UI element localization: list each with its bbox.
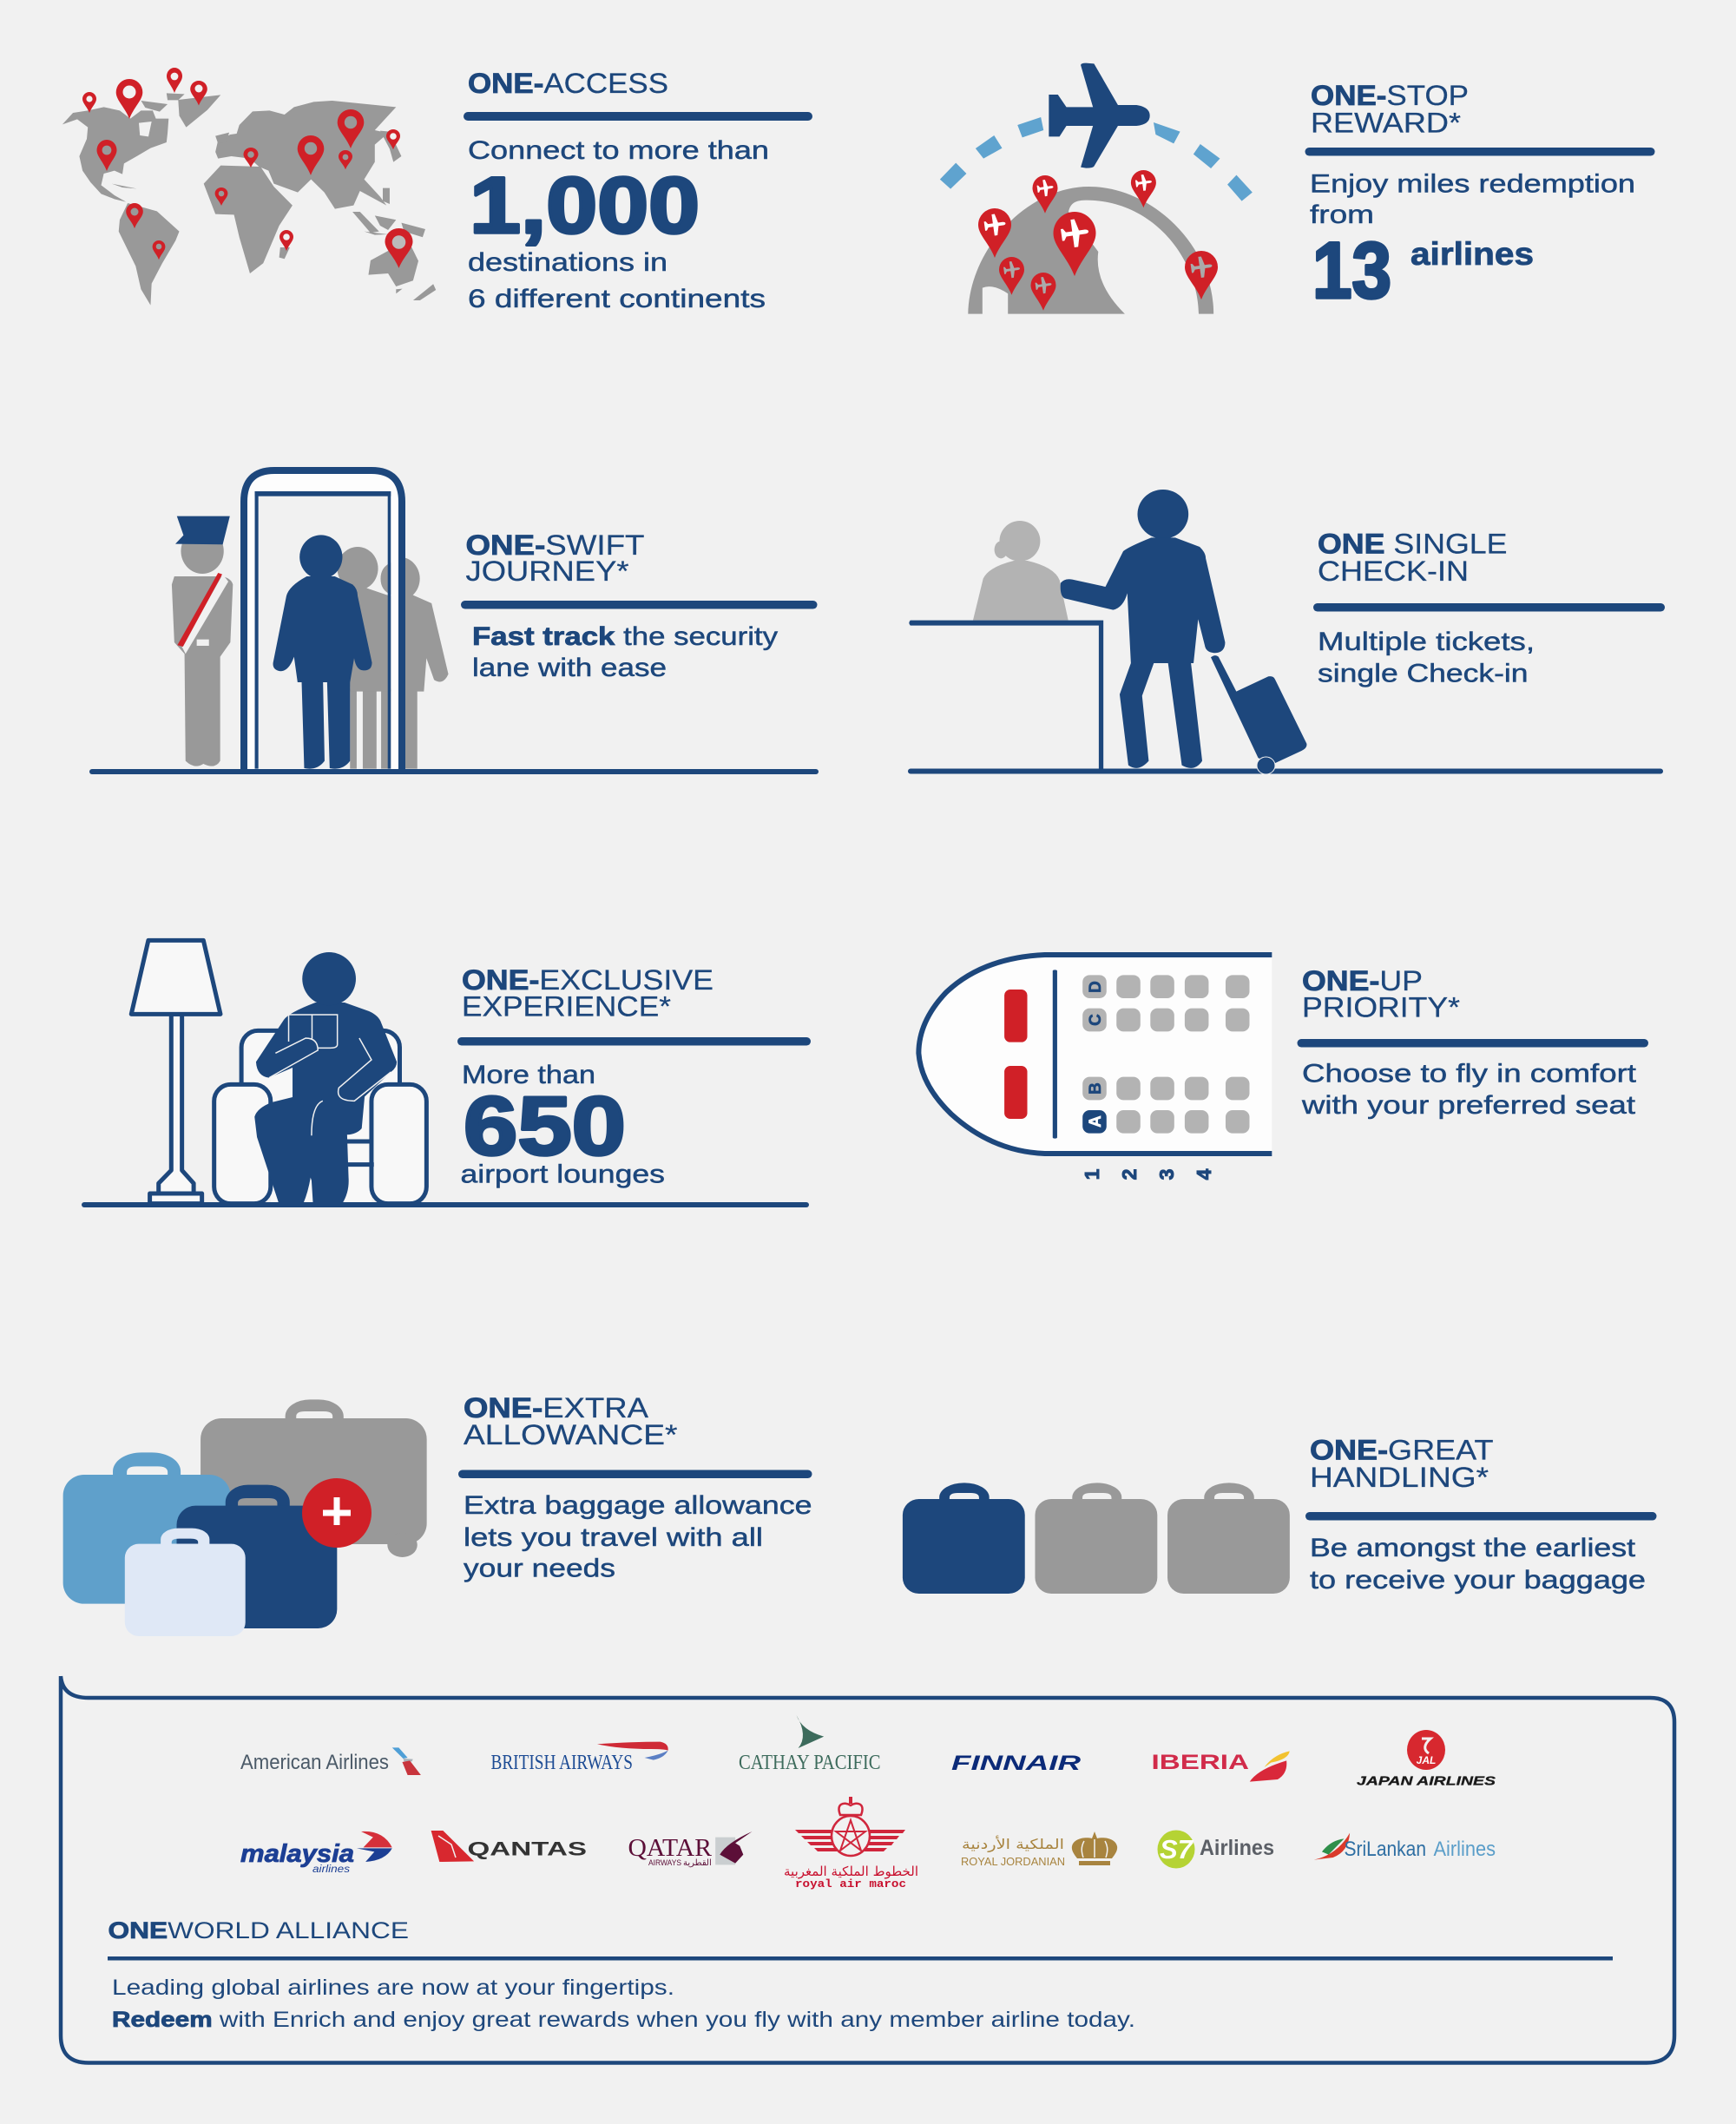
icon: traveller bbox=[273, 535, 372, 769]
icon: pale suitcase bbox=[125, 1529, 246, 1636]
heading: one-stop reward bbox=[1311, 80, 1469, 139]
text block: alliance copy bbox=[112, 1976, 1135, 2032]
text block: allowance copy: lets you travel with all bbox=[464, 1523, 763, 1552]
icon: floor lamp bbox=[131, 940, 220, 1204]
icon: grey suitcase bbox=[201, 1399, 427, 1557]
heading: one-extra allowance: ONE- EXTRA bbox=[464, 1392, 649, 1424]
logo: American Airlines: American Airlines bbox=[240, 1751, 389, 1774]
heading: one-stop reward: ONE-STOP bbox=[1311, 80, 1469, 111]
logo: Royal Air Maroc: royal air maroc bbox=[795, 1877, 906, 1891]
text block: priority copy bbox=[1301, 1059, 1637, 1120]
logo: Royal Air Maroc: الخطوط الملكية المغربية bbox=[784, 1864, 918, 1879]
icon: grey bag bbox=[1167, 1483, 1290, 1594]
heading: one single check-in bbox=[1318, 528, 1507, 587]
text block: lounge copy: More than bbox=[462, 1061, 595, 1089]
logo: Malaysia Airlines: airlines bbox=[312, 1863, 350, 1875]
panel: one-swift journey bbox=[89, 470, 819, 774]
heading: one-extra allowance bbox=[464, 1392, 677, 1450]
row numbers: 1 bbox=[1081, 1168, 1103, 1180]
text block: access copy: Connect to more than bbox=[468, 136, 769, 165]
seat letters: B bbox=[1087, 1082, 1105, 1095]
icon: three bags bbox=[903, 1483, 1290, 1594]
heading: one-swift journey: JOURNEY* bbox=[465, 556, 628, 587]
text block: allowance copy: your needs bbox=[464, 1554, 615, 1583]
icon: counter bbox=[909, 621, 1103, 773]
logo: Qantas bbox=[431, 1831, 587, 1862]
text block: reward copy: Enjoy miles redemption bbox=[1310, 170, 1635, 198]
heading: one-up priority: ONE- UP bbox=[1302, 965, 1423, 996]
icon: suitcase bbox=[1211, 655, 1306, 764]
panel: one-stop reward bbox=[940, 63, 1654, 315]
row numbers: 3 bbox=[1155, 1169, 1178, 1180]
logo: Iberia bbox=[1151, 1751, 1290, 1782]
icon: security scene bbox=[172, 470, 449, 769]
heading: one-exclusive experience: EXPERIENCE* bbox=[462, 991, 671, 1023]
text block: access copy: 6 different continents bbox=[468, 285, 766, 313]
heading: one-access: ONE-ACCESS bbox=[468, 68, 668, 99]
heading: one-great handling: ONE- GREAT bbox=[1310, 1434, 1493, 1465]
icon: plane pins bbox=[978, 170, 1218, 311]
text block: priority copy: with your preferred seat bbox=[1301, 1091, 1636, 1120]
row numbers bbox=[1081, 1168, 1215, 1180]
text block: access copy: 1,000 bbox=[470, 161, 700, 250]
icon: blue suitcase bbox=[63, 1452, 230, 1604]
logo: S7 Airlines: S7 bbox=[1160, 1834, 1194, 1864]
heading: one single check-in: CHECK-IN bbox=[1318, 556, 1469, 587]
icon: seated traveller bbox=[254, 952, 397, 1204]
text block: check-in copy bbox=[1318, 628, 1535, 687]
heading: one-swift journey bbox=[465, 529, 644, 587]
icon: passenger bbox=[1061, 490, 1225, 768]
logo: Japan Airlines bbox=[1357, 1730, 1496, 1788]
icon: globe bbox=[968, 187, 1213, 314]
text block: check-in copy: Multiple tickets, bbox=[1318, 628, 1535, 656]
text block: reward copy: airlines bbox=[1410, 236, 1534, 272]
icon: suitcase wheel bbox=[1257, 757, 1275, 774]
text block: allowance copy bbox=[464, 1491, 812, 1583]
logo: Japan Airlines: JAL bbox=[1417, 1754, 1436, 1766]
text block: handling copy bbox=[1310, 1534, 1646, 1595]
text block: check-in copy: single Check-in bbox=[1318, 660, 1528, 687]
icon: world map bbox=[62, 93, 436, 306]
icon: map pins bbox=[82, 68, 413, 268]
text block: allowance copy: Extra baggage allowance bbox=[464, 1491, 812, 1520]
seat letters bbox=[1087, 981, 1105, 1128]
logo: Qatar Airways: QATAR bbox=[628, 1835, 712, 1862]
logo: Qatar Airways bbox=[628, 1831, 753, 1868]
heading: one-exclusive experience: ONE- EXCLUSIVE bbox=[462, 964, 713, 996]
logo: Finnair: FINNAIR bbox=[951, 1752, 1082, 1775]
panel: one-up priority bbox=[918, 955, 1648, 1180]
logo: SriLankan Airlines: Airlines bbox=[1434, 1838, 1496, 1861]
panel: oneworld alliance bbox=[61, 1676, 1674, 2062]
seat letters: C bbox=[1087, 1014, 1105, 1026]
logo: Qatar Airways: AIRWAYS bbox=[648, 1858, 681, 1867]
text block: reward copy bbox=[1310, 170, 1635, 315]
icon: agent bbox=[973, 521, 1069, 621]
heading: one-stop reward: REWARD* bbox=[1311, 108, 1461, 139]
logo: Malaysia Airlines bbox=[240, 1831, 392, 1875]
icon: navy suitcase bbox=[177, 1485, 337, 1628]
icon: officer bbox=[172, 516, 233, 766]
icon: grey bag bbox=[1035, 1483, 1157, 1594]
heading: one-swift journey: ONE- SWIFT bbox=[465, 529, 644, 561]
icon: aircraft nose bbox=[918, 955, 1272, 1154]
icon: red plus badge bbox=[302, 1478, 372, 1548]
icon: gate opening bbox=[255, 491, 391, 769]
logo: SriLankan Airlines: SriLankan bbox=[1344, 1838, 1426, 1861]
icon: grey passengers bbox=[338, 547, 449, 769]
logo: British Airways: BRITISH AIRWAYS bbox=[491, 1752, 633, 1774]
heading: one-up priority: PRIORITY* bbox=[1302, 991, 1460, 1023]
icon: cabin seat map bbox=[918, 955, 1272, 1180]
logo: Royal Jordanian bbox=[961, 1831, 1117, 1868]
text block: priority copy: Choose to fly in comfort bbox=[1302, 1059, 1637, 1088]
heading: one-great handling bbox=[1310, 1434, 1493, 1493]
icon: luggage group bbox=[63, 1399, 427, 1636]
text block: swift copy: lane with ease bbox=[472, 654, 667, 682]
logo: Iberia: IBERIA bbox=[1151, 1751, 1249, 1774]
text block: lounge copy: airport lounges bbox=[460, 1160, 665, 1189]
logo: S7 Airlines bbox=[1158, 1830, 1274, 1868]
icon: check-in scene bbox=[909, 490, 1306, 773]
logo: Cathay Pacific bbox=[739, 1715, 880, 1774]
heading: one single check-in: ONE SINGLE bbox=[1318, 528, 1507, 559]
logo: Malaysia Airlines: malaysia bbox=[240, 1840, 354, 1868]
panel: one-great handling bbox=[903, 1434, 1656, 1595]
icon: security gate bbox=[244, 470, 402, 769]
logo: Qatar Airways: القطرية bbox=[683, 1858, 712, 1868]
text block: lounge copy: 650 bbox=[464, 1080, 626, 1173]
text block: swift copy bbox=[472, 622, 778, 682]
text block: handling copy: Be amongst the earliest bbox=[1310, 1534, 1636, 1562]
heading: one-up priority bbox=[1302, 965, 1460, 1023]
panel: one-extra allowance bbox=[63, 1392, 812, 1636]
text block: alliance copy: Leading global airlines are now at your fingertips. bbox=[112, 1976, 674, 2000]
logo: Japan Airlines: JAPAN AIRLINES bbox=[1357, 1774, 1496, 1788]
text block: reward copy: from bbox=[1310, 201, 1374, 229]
text block: access copy bbox=[468, 136, 769, 313]
logo: S7 Airlines: Airlines bbox=[1200, 1836, 1274, 1860]
frame bbox=[61, 1676, 1674, 2062]
row numbers: 4 bbox=[1193, 1168, 1215, 1180]
text block: alliance copy: Redeem with Enrich and enjoy great rewards when you fly with any member airline today. bbox=[112, 2008, 1135, 2032]
text block: access copy: destinations in bbox=[468, 248, 667, 277]
text block: swift copy: Fast track the security bbox=[472, 622, 778, 651]
heading: one-extra allowance: ALLOWANCE* bbox=[464, 1419, 677, 1450]
heading: oneworld alliance: ONE WORLD ALLIANCE bbox=[108, 1917, 409, 1943]
panel: one-exclusive experience bbox=[82, 940, 811, 1207]
logo: Royal Jordanian: ROYAL JORDANIAN bbox=[961, 1855, 1065, 1868]
icon: armchair bbox=[214, 1030, 426, 1204]
text block: handling copy: to receive your baggage bbox=[1310, 1566, 1646, 1595]
logo: SriLankan Airlines bbox=[1314, 1833, 1496, 1861]
row numbers: 2 bbox=[1118, 1169, 1141, 1180]
seat letters: D bbox=[1087, 981, 1105, 993]
icon: galley and seats bbox=[1004, 970, 1250, 1139]
heading: one-exclusive experience bbox=[462, 964, 713, 1023]
logo: Royal Jordanian: الملكية الأردنية bbox=[962, 1835, 1064, 1853]
seat letters: A bbox=[1087, 1115, 1105, 1128]
logo: Royal Air Maroc bbox=[784, 1797, 918, 1891]
panel: one single check-in bbox=[908, 490, 1665, 774]
icon: plane and route bbox=[940, 63, 1253, 201]
logo: Cathay Pacific: CATHAY PACIFIC bbox=[739, 1752, 880, 1774]
icon: navy bag bbox=[903, 1483, 1025, 1594]
logo: Qantas: QANTAS bbox=[467, 1838, 587, 1859]
logo: British Airways bbox=[491, 1742, 668, 1774]
text block: lounge copy bbox=[460, 1061, 665, 1189]
text block: reward copy: 13 bbox=[1312, 227, 1391, 315]
heading: one-great handling: HANDLING* bbox=[1310, 1462, 1489, 1493]
panel: one-access bbox=[62, 68, 812, 313]
icon: lounge scene bbox=[131, 940, 426, 1204]
